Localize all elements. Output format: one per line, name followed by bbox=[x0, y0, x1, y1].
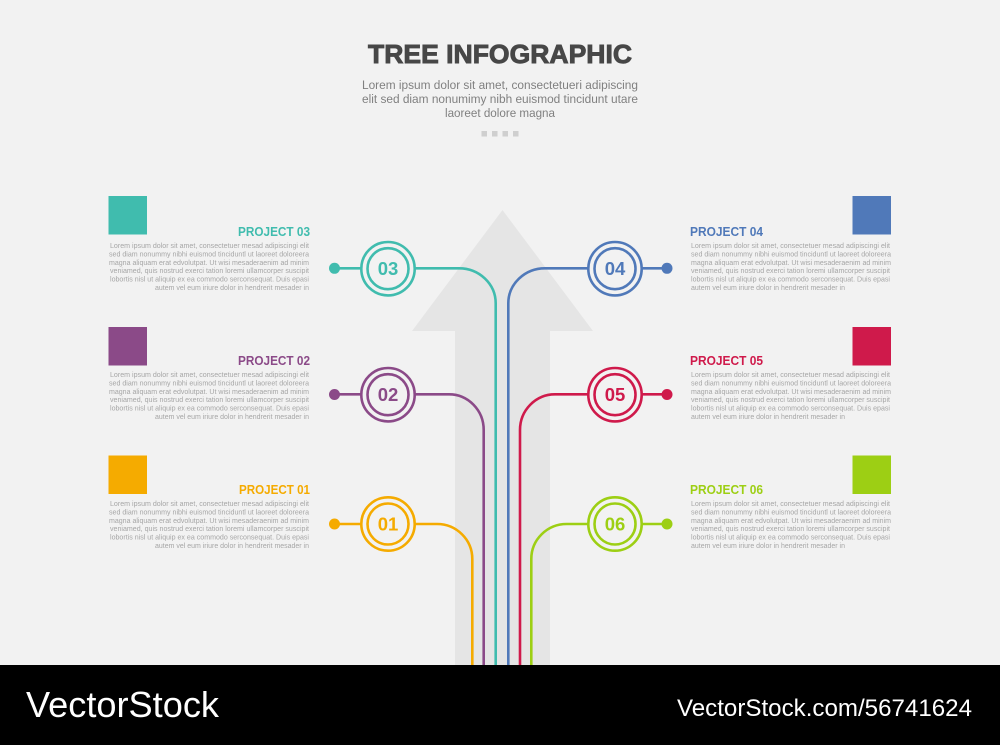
square: project 06 bbox=[852, 456, 891, 494]
text: project 06: Lorem ipsum dolor sit amet, consectetuer mesad adipiscingi elit bbox=[691, 499, 891, 508]
text: project 06 bbox=[691, 499, 892, 550]
branch: 04 blue bbox=[508, 242, 672, 665]
text: project 03: sed diam nonummy nibhi euismod tinciduntl ut laoreet doloreera bbox=[109, 249, 310, 258]
number 05: 05 bbox=[605, 384, 625, 405]
text: project 06: lobortis nisl ut aliquip ex ea commodo serconsequat. Duis epasi bbox=[691, 533, 890, 542]
text: project 05: lobortis nisl ut aliquip ex ea commodo serconsequat. Duis epasi bbox=[691, 404, 890, 413]
watermark footer bar bbox=[0, 665, 1000, 745]
text: project 06: sed diam nonummy nibhi euismod tinciduntl ut laoreet doloreera bbox=[691, 507, 892, 516]
text: project 05: Lorem ipsum dolor sit amet, consectetuer mesad adipiscingi elit bbox=[691, 370, 891, 379]
text: project 01: Lorem ipsum dolor sit amet, consectetuer mesad adipiscingi elit bbox=[110, 499, 310, 508]
text: project 05: veniamed, quis nostrud exerci tation loremi ullamcorper suscipit bbox=[691, 395, 891, 404]
text: project 01: lobortis nisl ut aliquip ex ea commodo serconsequat. Duis epasi bbox=[110, 533, 309, 542]
text: project 02: veniamed, quis nostrud exerci tation loremi ullamcorper suscipit bbox=[110, 395, 310, 404]
text: project 03: magna aliquam erat edvolutpat. Ut wisi mesaderaenim ad minim bbox=[109, 258, 309, 267]
text: project 04: sed diam nonummy nibhi euismod tinciduntl ut laoreet doloreera bbox=[691, 249, 892, 258]
number 02: 02 bbox=[378, 384, 398, 405]
square: project 03 bbox=[108, 196, 147, 234]
text: project 01 bbox=[109, 499, 310, 550]
branch: 03 teal bbox=[329, 242, 496, 665]
text: project 03: veniamed, quis nostrud exerci tation loremi ullamcorper suscipit bbox=[110, 266, 310, 275]
square: project 01 bbox=[108, 456, 147, 494]
text: project 02: autem vel eum iriure dolor in hendrerit mesader in bbox=[155, 412, 309, 421]
text: project 04: magna aliquam erat edvolutpat. Ut wisi mesaderaenim ad minim bbox=[691, 258, 891, 267]
heading: project 06: PROJECT 06 bbox=[690, 483, 763, 497]
number 01: 01 bbox=[378, 513, 398, 534]
text: project 04: lobortis nisl ut aliquip ex ea commodo serconsequat. Duis epasi bbox=[691, 275, 890, 284]
text: project 06: magna aliquam erat edvolutpat. Ut wisi mesaderaenim ad minim bbox=[691, 516, 891, 525]
text: project 02: Lorem ipsum dolor sit amet, consectetuer mesad adipiscingi elit bbox=[110, 370, 310, 379]
subtitle text bbox=[362, 78, 638, 120]
pagination dots bbox=[482, 131, 518, 136]
text: project 04: Lorem ipsum dolor sit amet, consectetuer mesad adipiscingi elit bbox=[691, 241, 891, 250]
text: project 02 bbox=[109, 370, 310, 421]
heading: project 05: PROJECT 05 bbox=[690, 354, 763, 368]
watermark logo text: VectorStock bbox=[26, 684, 220, 725]
square: project 02 bbox=[108, 327, 147, 366]
subtitle text: elit sed diam nonumimy nibh euismod tincidunt utare bbox=[362, 92, 638, 106]
text: project 03 bbox=[109, 241, 310, 292]
text: project 05: sed diam nonummy nibhi euismod tinciduntl ut laoreet doloreera bbox=[691, 378, 892, 387]
subtitle text: Lorem ipsum dolor sit amet, consectetueri adipiscing bbox=[362, 78, 638, 92]
text: project 04: veniamed, quis nostrud exerci tation loremi ullamcorper suscipit bbox=[691, 266, 891, 275]
text: project 06: autem vel eum iriure dolor in hendrerit mesader in bbox=[691, 541, 845, 550]
text: project 02: magna aliquam erat edvolutpat. Ut wisi mesaderaenim ad minim bbox=[109, 387, 309, 396]
text: project 04: autem vel eum iriure dolor in hendrerit mesader in bbox=[691, 283, 845, 292]
watermark url text: VectorStock.com/56741624 bbox=[677, 695, 972, 722]
square: project 05 bbox=[852, 327, 891, 366]
text: project 02: lobortis nisl ut aliquip ex ea commodo serconsequat. Duis epasi bbox=[110, 404, 309, 413]
subtitle text: laoreet dolore magna bbox=[445, 106, 555, 120]
text: project 02: sed diam nonummy nibhi euismod tinciduntl ut laoreet doloreera bbox=[109, 378, 310, 387]
number 03: 03 bbox=[378, 258, 398, 279]
square: project 04 bbox=[852, 196, 891, 234]
text: project 04 bbox=[691, 241, 892, 292]
branch: 01 orange bbox=[329, 497, 472, 665]
text: project 01: sed diam nonummy nibhi euismod tinciduntl ut laoreet doloreera bbox=[109, 507, 310, 516]
text: project 01: autem vel eum iriure dolor in hendrerit mesader in bbox=[155, 541, 309, 550]
number 06: 06 bbox=[605, 513, 625, 534]
text: project 01: magna aliquam erat edvolutpat. Ut wisi mesaderaenim ad minim bbox=[109, 516, 309, 525]
text: project 03: autem vel eum iriure dolor in hendrerit mesader in bbox=[155, 283, 309, 292]
branch: 06 green bbox=[531, 497, 672, 665]
text: project 05: autem vel eum iriure dolor in hendrerit mesader in bbox=[691, 412, 845, 421]
branch: 05 red bbox=[520, 368, 672, 665]
text: project 06: veniamed, quis nostrud exerci tation loremi ullamcorper suscipit bbox=[691, 524, 891, 533]
branch: 02 purple bbox=[329, 368, 484, 665]
text: project 05 bbox=[691, 370, 892, 421]
text: project 05: magna aliquam erat edvolutpat. Ut wisi mesaderaenim ad minim bbox=[691, 387, 891, 396]
text: project 03: lobortis nisl ut aliquip ex ea commodo serconsequat. Duis epasi bbox=[110, 275, 309, 284]
background arrow bbox=[412, 210, 593, 665]
heading: project 03: PROJECT 03 bbox=[238, 225, 310, 239]
heading: project 01: PROJECT 01 bbox=[239, 483, 310, 497]
heading: project 02: PROJECT 02 bbox=[238, 354, 310, 368]
title: TREE INFOGRAPHIC bbox=[368, 39, 632, 69]
number 04: 04 bbox=[605, 258, 626, 279]
text: project 03: Lorem ipsum dolor sit amet, consectetuer mesad adipiscingi elit bbox=[110, 241, 310, 250]
heading: project 04: PROJECT 04 bbox=[690, 225, 763, 239]
text: project 01: veniamed, quis nostrud exerci tation loremi ullamcorper suscipit bbox=[110, 524, 310, 533]
